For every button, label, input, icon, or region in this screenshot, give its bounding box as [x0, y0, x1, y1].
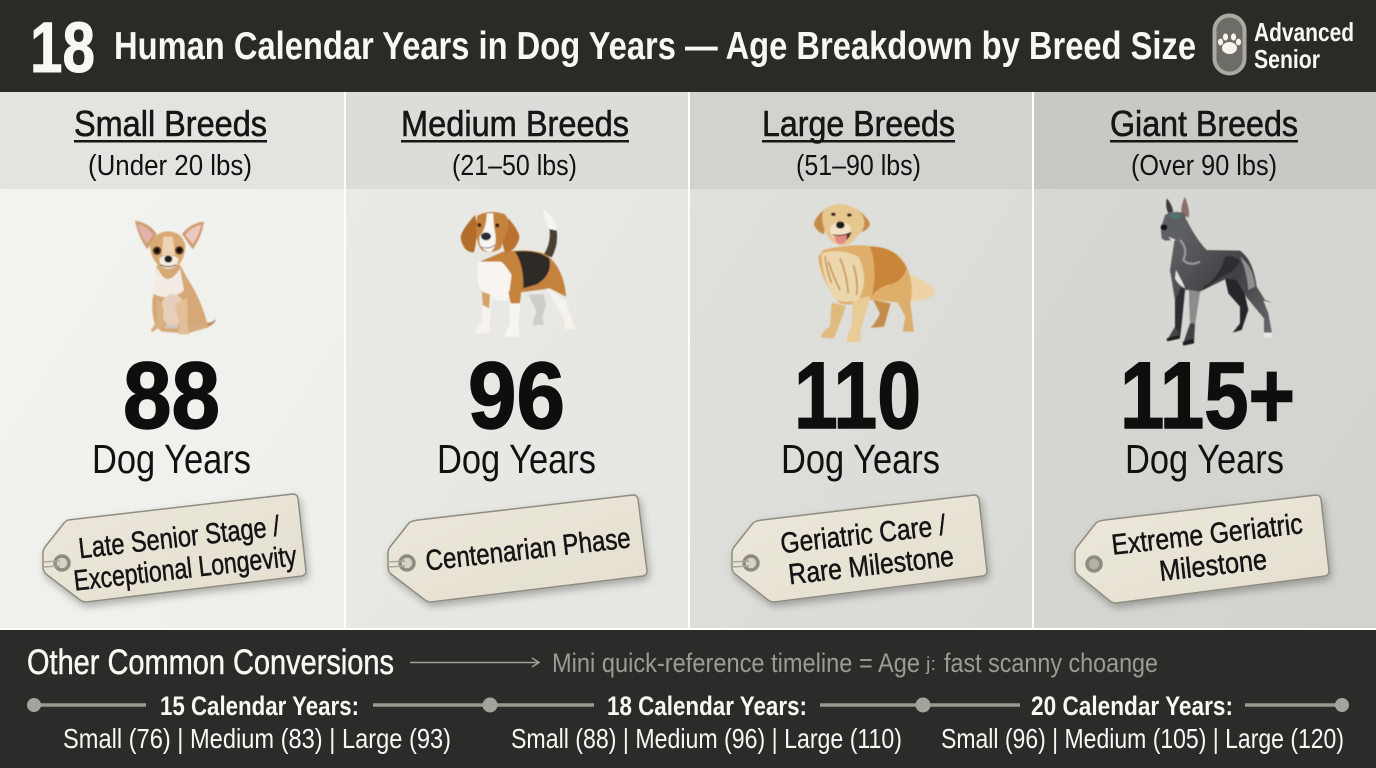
conversion: 20 years [941, 691, 1344, 754]
timeline [27, 698, 1349, 712]
value: 96 dog years: Dog Years [437, 436, 596, 482]
subtitle note: Mini quick-reference timeline = Age [552, 648, 920, 678]
title number: 18 [30, 9, 95, 88]
subtitle note [552, 648, 1158, 678]
heading: large breeds: Large Breeds [762, 103, 955, 144]
badge label: Advanced [1254, 17, 1354, 47]
icon: golden retriever illustration [814, 204, 936, 342]
subtitle note: fast scanny choange [944, 648, 1158, 678]
heading: small breeds: (Under 20 lbs) [88, 150, 252, 182]
panel: large breeds [690, 92, 1032, 628]
header bar [0, 0, 1376, 92]
icon: paw capsule [1214, 16, 1244, 74]
tag: geriatric care: Rare Milestone [787, 541, 955, 591]
conversion: 15 years: 15 Calendar Years: [160, 691, 359, 721]
heading: medium breeds: (21–50 lbs) [452, 150, 577, 182]
heading: medium breeds: Medium Breeds [401, 103, 629, 144]
heading: small breeds [74, 103, 267, 182]
panel: medium breeds [346, 92, 688, 628]
panel: giant breeds [1034, 92, 1376, 628]
heading: other common conversions: Other Common Conversions [27, 643, 394, 682]
tag: geriatric care [731, 495, 987, 602]
conversion: 15 years: Small (76) | Medium (83) | Large (93) [63, 723, 451, 754]
panel: other common conversions [0, 630, 1376, 768]
tag: late senior stage: Late Senior Stage / [77, 511, 282, 565]
tag: geriatric care: Geriatric Care / [779, 510, 948, 560]
badge label: Senior [1254, 44, 1320, 74]
value: 96 dog years [437, 343, 596, 482]
conversion: 18 years: 18 Calendar Years: [607, 691, 807, 721]
icon: beagle illustration [461, 211, 575, 337]
tag: centenarian phase [387, 495, 647, 602]
tag: extreme geriatric: Milestone [1158, 544, 1269, 588]
value: 115+ dog years [1120, 343, 1295, 482]
value: 88 dog years: 88 [123, 343, 220, 449]
conversion: 15 years [63, 691, 451, 754]
conversion: 20 years: 20 Calendar Years: [1031, 691, 1233, 721]
value: 96 dog years: 96 [468, 343, 565, 449]
heading: giant breeds: Giant Breeds [1110, 103, 1298, 144]
value: 110 dog years [781, 343, 940, 482]
value: 88 dog years [92, 343, 251, 482]
tag: late senior stage [42, 494, 306, 602]
arrow [410, 658, 539, 667]
heading: giant breeds [1110, 103, 1298, 182]
value: 88 dog years: Dog Years [92, 436, 251, 482]
tag: extreme geriatric [1075, 495, 1329, 603]
value: 110 dog years: Dog Years [781, 436, 940, 482]
panel: small breeds [0, 92, 344, 628]
title: Human Calendar Years in Dog Years — Age Breakdown by Breed Size [114, 25, 1196, 68]
heading: large breeds: (51–90 lbs) [796, 150, 921, 182]
tag: late senior stage: Exceptional Longevity [72, 540, 299, 598]
value: 115+ dog years: Dog Years [1125, 436, 1284, 482]
heading: large breeds [762, 103, 955, 182]
subtitle note: j: [925, 654, 936, 674]
heading: medium breeds [401, 103, 629, 182]
conversion: 18 years: Small (88) | Medium (96) | Large (110) [511, 723, 902, 754]
tag: centenarian phase: Centenarian Phase [424, 522, 632, 578]
conversion: 18 years [511, 691, 902, 754]
icon: great dane illustration [1161, 197, 1273, 346]
badge label [1254, 17, 1354, 74]
badge: advanced senior [1214, 16, 1354, 74]
icon: chihuahua illustration [135, 221, 217, 334]
tag: extreme geriatric: Extreme Geriatric [1110, 508, 1304, 562]
value: 110 dog years: 110 [794, 343, 921, 449]
heading: giant breeds: (Over 90 lbs) [1131, 150, 1277, 182]
heading: small breeds: Small Breeds [74, 103, 267, 144]
value: 115+ dog years: 115+ [1120, 343, 1295, 449]
